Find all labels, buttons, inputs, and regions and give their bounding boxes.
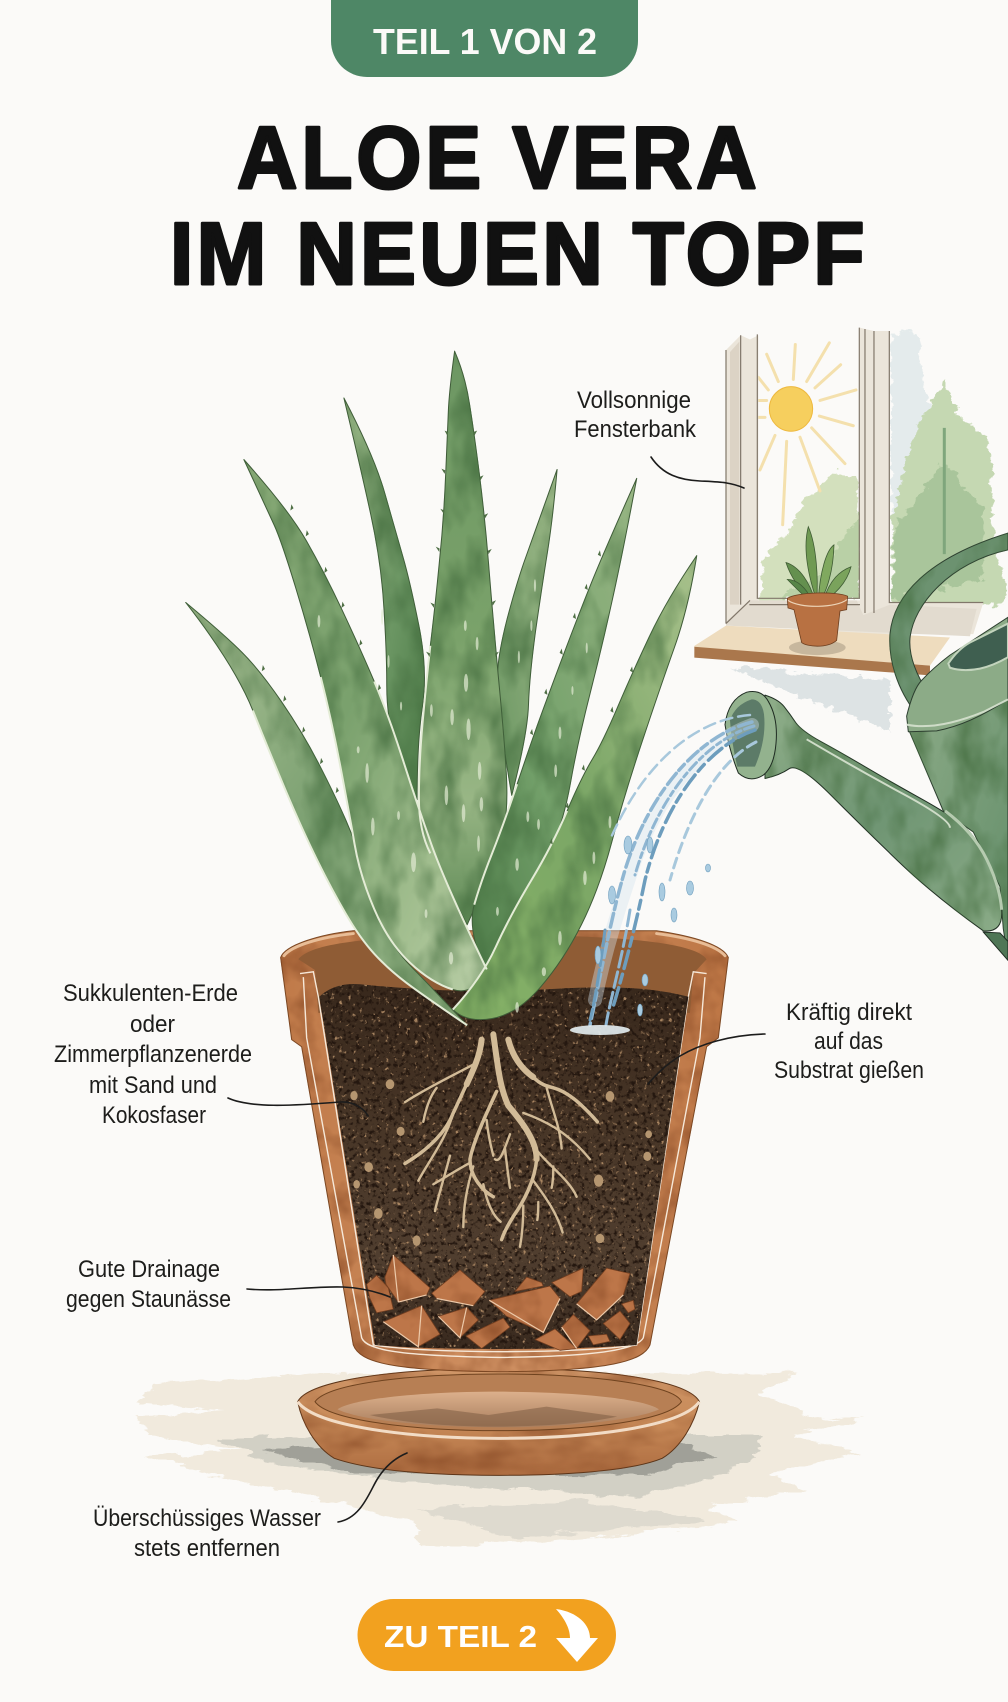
- spout nozzle: [725, 691, 776, 779]
- icon: curved down arrow: [556, 1609, 598, 1662]
- callout label: succulent soil: Kokosfaser: [102, 1102, 206, 1129]
- large left leaf: [244, 460, 487, 991]
- button: to part 2: ZU TEIL 2: [384, 1619, 537, 1654]
- can handle: [890, 533, 1008, 714]
- callout label: remove excess water: [93, 1453, 407, 1562]
- callout label: remove excess water: Überschüssiges Wasser: [93, 1505, 321, 1532]
- callout label: water on substrate: auf das: [814, 1028, 883, 1055]
- shard highlights: [383, 1255, 623, 1349]
- illustration: sunny window with windowsill: [694, 328, 1007, 731]
- callout label: sunny windowsill: Vollsonnige: [577, 387, 691, 414]
- pot cut edge highlights: [300, 972, 707, 1357]
- back right leaf: [497, 469, 557, 795]
- drainage shards: [367, 1255, 635, 1350]
- callout label: succulent soil: [54, 980, 368, 1129]
- callout label: succulent soil: Zimmerpflanzenerde: [54, 1041, 252, 1068]
- can shoulder: [907, 617, 1008, 732]
- can band: [907, 699, 1008, 726]
- pot interior back wall: [298, 934, 707, 1013]
- callout label: water on substrate: Substrat gießen: [774, 1057, 924, 1084]
- leaf pale edges: [253, 646, 567, 1025]
- badge: part 1 of 2: [331, 0, 638, 77]
- title: IM NEUEN TOPF: [170, 205, 864, 303]
- callout label: sunny windowsill: [574, 387, 744, 488]
- button: to part 2: [358, 1599, 616, 1671]
- back left leaf: [344, 398, 424, 800]
- callout label: water on substrate: Kräftig direkt: [786, 999, 912, 1026]
- center tall leaf: [419, 351, 507, 925]
- can opening: [948, 624, 1008, 670]
- roots: [405, 1034, 597, 1247]
- callout label: drainage: gegen Staunässe: [66, 1286, 231, 1313]
- cutaway terracotta pot: [281, 931, 728, 1372]
- callout label: succulent soil: oder: [130, 1011, 175, 1038]
- badge: part 1 of 2: TEIL 1 VON 2: [373, 21, 597, 62]
- title: ALOE VERA: [237, 109, 757, 207]
- callout label: drainage: [66, 1256, 390, 1313]
- soil pebbles: [350, 1079, 652, 1246]
- callout label: succulent soil: Sukkulenten-Erde: [63, 980, 238, 1007]
- aloe vera plant: [186, 351, 697, 1025]
- leaf spines: [262, 431, 633, 844]
- front right leaf: [453, 556, 697, 1020]
- far left leaf: [186, 602, 467, 1025]
- callout label: drainage: Gute Drainage: [78, 1256, 220, 1283]
- can spout: [765, 695, 1002, 931]
- right center leaf: [472, 478, 637, 969]
- table wash under saucer: [135, 1373, 868, 1547]
- callout label: sunny windowsill: Fensterbank: [574, 416, 697, 443]
- callout label: remove excess water: stets entfernen: [134, 1535, 280, 1562]
- pot rim highlights: [284, 934, 725, 956]
- pot outer shell: [281, 931, 728, 1372]
- water stream: [570, 715, 756, 1035]
- callout label: water on substrate: [648, 999, 924, 1084]
- title: [170, 109, 864, 303]
- watering can: [725, 533, 1008, 960]
- callout label: succulent soil: mit Sand und: [89, 1072, 217, 1099]
- leaf white flecks: [317, 579, 611, 1013]
- can body: [908, 689, 1008, 960]
- soil: [319, 984, 688, 1349]
- saucer: [298, 1368, 699, 1475]
